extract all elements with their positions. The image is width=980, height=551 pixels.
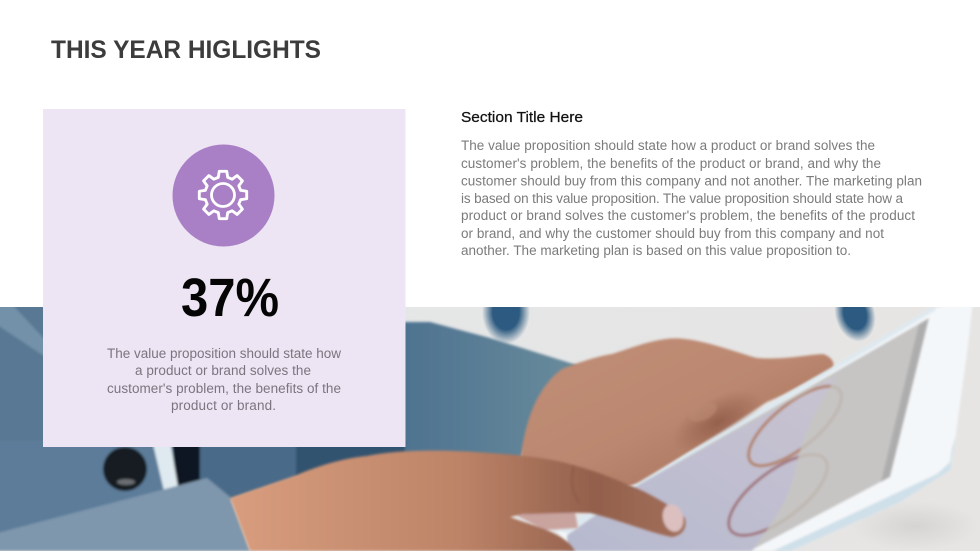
- body text: another. The marketing plan is based on this value proposition to.: [461, 243, 851, 258]
- photo: front hand: [230, 451, 686, 551]
- card description: customer's problem, the benefits of the: [107, 381, 341, 396]
- body text: product or brand solves the customer's problem, the benefits of the product: [461, 208, 915, 223]
- section heading: Section Title Here: [461, 109, 583, 126]
- body text: The value proposition should state how a product or brand solves the: [461, 138, 875, 153]
- card description: product or brand.: [171, 398, 276, 413]
- photo: rear hand: [521, 338, 834, 490]
- card description: The value proposition should state how: [107, 346, 341, 361]
- body text: customer should buy from this company and not another. The marketing plan: [461, 174, 922, 188]
- statistic value: 37%: [181, 268, 279, 328]
- card description: a product or brand solves the: [135, 363, 311, 378]
- body text: is based on this value proposition. The value proposition should state how a: [461, 191, 903, 206]
- panel: statistic card: [43, 109, 406, 447]
- body text: customer's problem, the benefits of the product or brand, and why the: [461, 156, 881, 171]
- body text: or brand, and why the customer should buy from this company and not: [461, 226, 884, 241]
- icon: gear: [172, 144, 274, 246]
- photo: tablet: [557, 300, 973, 551]
- card description: [107, 346, 341, 413]
- photo: hands holding a tablet: [0, 280, 980, 551]
- body text: [461, 138, 922, 258]
- title: THIS YEAR HIGLIGHTS: [51, 36, 321, 64]
